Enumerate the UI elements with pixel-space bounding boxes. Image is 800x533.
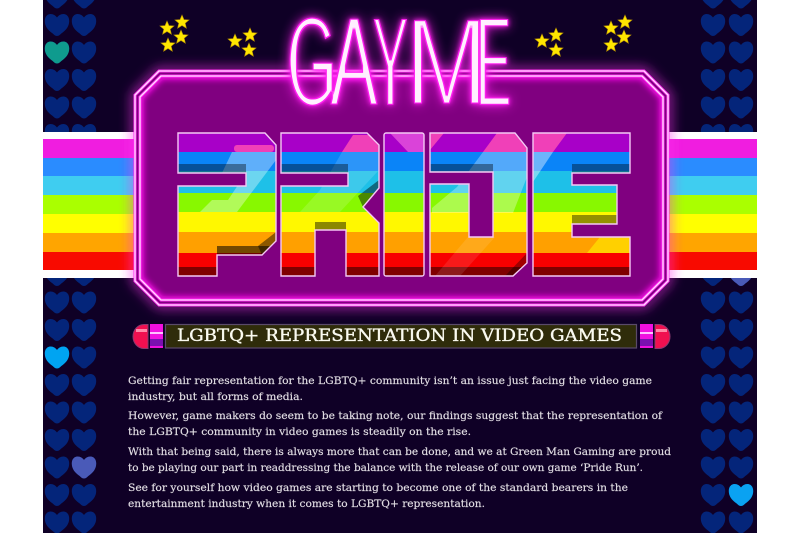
intro text block: to be playing our part in readdressing the balance with the release of our own game ‘Pride Run’. xyxy=(128,462,643,474)
intro text block: However, game makers do seem to be taking note, our findings suggest that the representation of xyxy=(128,410,663,422)
intro text block: entertainment industry when it comes to LGBTQ+ representation. xyxy=(128,498,485,510)
neon title: GAYME xyxy=(280,0,516,134)
rainbow band xyxy=(43,132,757,278)
banner cap: right xyxy=(640,324,670,348)
intro text block xyxy=(128,375,671,510)
pride letter P (rainbow block) xyxy=(177,132,277,277)
hearts: left columns xyxy=(45,0,96,533)
intro text block: the LGBTQ+ community in video games is steadily on the rise. xyxy=(128,426,471,438)
stars: right xyxy=(535,28,563,56)
heart: periwinkle right xyxy=(729,264,753,286)
pride letter D (rainbow block) xyxy=(429,132,528,277)
stars: left xyxy=(228,28,257,56)
pride letter E (rainbow block) xyxy=(532,132,631,277)
banner title: LGBTQ+ REPRESENTATION IN VIDEO GAMES xyxy=(177,326,622,345)
banner bar xyxy=(166,324,636,348)
heart: teal left xyxy=(45,42,69,64)
heart: bright blue right xyxy=(729,484,753,506)
panel glow xyxy=(135,71,668,305)
intro text block: See for yourself how video games are starting to become one of the standard bearers in the xyxy=(128,482,628,494)
hearts: right columns xyxy=(701,0,753,533)
banner cap: left xyxy=(133,324,163,348)
pride letter I (rainbow block) xyxy=(383,132,425,277)
intro text block: industry, but all forms of media. xyxy=(128,391,303,403)
intro text block: Getting fair representation for the LGBTQ+ community isn’t an issue just facing the video game xyxy=(128,375,652,387)
stars: far left xyxy=(160,15,189,51)
intro text block: With that being said, there is always more that can be done, and we at Green Man Gaming are proud xyxy=(128,446,671,458)
pride letter R (rainbow block) xyxy=(280,132,380,277)
panel: purple octagon xyxy=(135,71,668,305)
heart: periwinkle left xyxy=(72,456,96,478)
heart: light blue left xyxy=(45,346,69,368)
stars: far right xyxy=(604,15,632,51)
